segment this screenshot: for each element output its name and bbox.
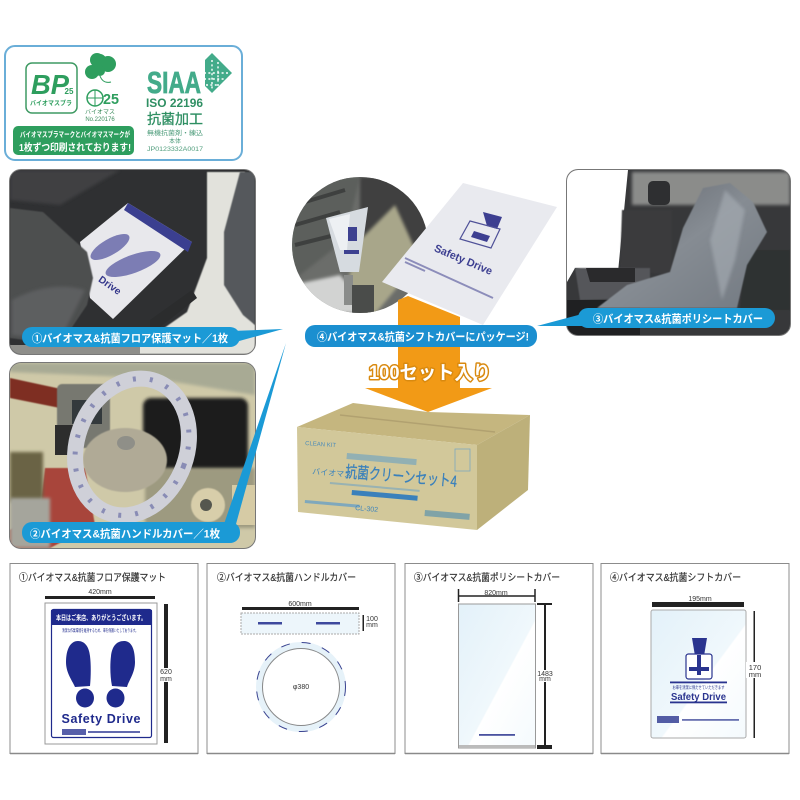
heading: ①バイオマス&抗菌フロア保護マット <box>19 571 166 584</box>
box print <box>305 441 470 520</box>
packaging print <box>405 212 502 298</box>
width dimension: 820mm <box>484 590 508 597</box>
text: antibacterial certification: 本体 <box>169 137 181 145</box>
height dimension: mm <box>749 670 761 679</box>
width dimension <box>242 601 359 610</box>
panel: shift cover photo <box>292 177 430 320</box>
width dimension: 420mm <box>88 589 112 596</box>
callout: printed on each sheet: バイオマスプラマークとバイオマスマークが <box>20 129 130 139</box>
label: floor mat: ①バイオマス&抗菌フロア保護マット／1枚 <box>32 331 228 345</box>
panel: shift cover packaging <box>382 183 557 325</box>
text: antibacterial certification <box>146 96 204 153</box>
callout: printed on each sheet <box>13 126 134 155</box>
text: antibacterial certification: 抗菌加工 <box>147 111 203 127</box>
label: seat cover: ③バイオマス&抗菌ポリシートカバー <box>593 312 763 326</box>
panel: floor mat photo <box>9 169 283 355</box>
shift cover bag diagram: お車を清潔に保たせていただきます <box>672 684 725 691</box>
flat wheel cover: mm <box>366 622 378 629</box>
width dimension: 195mm <box>688 596 712 603</box>
icon: biomass plastic mark: 25 <box>65 87 74 96</box>
panel: certification badge <box>5 46 242 160</box>
width dimension: 600mm <box>288 601 312 608</box>
callout: printed on each sheet: 1枚ずつ印刷されております! <box>19 141 131 154</box>
panel: seat cover spec <box>405 564 593 754</box>
floor mat diagram: 清潔な作業環境を維持するため、車を保護いたしております。 <box>62 627 138 634</box>
width dimension <box>458 589 535 602</box>
floor mat diagram: Safety Drive <box>62 712 141 726</box>
height dimension: mm <box>539 676 551 683</box>
flat wheel cover: 100 <box>366 616 378 623</box>
box print: CL-302 <box>355 505 378 514</box>
photo: car floor with mat <box>10 170 255 354</box>
height dimension: 620 <box>160 669 172 676</box>
shift cover bag <box>326 207 368 272</box>
arrow: orange down <box>365 296 492 412</box>
height dimension: 1483 <box>537 671 553 678</box>
heading: ③バイオマス&抗菌ポリシートカバー <box>414 571 560 584</box>
photo: seat with poly cover <box>567 170 790 335</box>
icon: biomass plastic mark: バイオマスプラ <box>30 99 72 107</box>
label: wheel cover: ②バイオマス&抗菌ハンドルカバー／1枚 <box>30 526 220 540</box>
ring wheel cover: φ380 <box>293 684 309 691</box>
heading: ④バイオマス&抗菌シフトカバー <box>610 571 741 584</box>
label: shift cover <box>305 325 537 347</box>
heading: ②バイオマス&抗菌ハンドルカバー <box>217 571 356 584</box>
height dimension <box>537 603 554 749</box>
icon: biomass clover mark: 25 <box>103 91 119 108</box>
label: wheel cover <box>22 343 286 543</box>
icon: SIAA mark: SIAA <box>147 65 201 100</box>
seat cover sheet <box>458 604 536 748</box>
panel: wheel cover spec <box>207 564 395 754</box>
height dimension: 170 <box>749 663 761 672</box>
height dimension: mm <box>160 676 172 683</box>
label: seat cover <box>537 308 775 328</box>
panel: seat cover photo <box>537 169 791 336</box>
width dimension <box>652 596 744 607</box>
icon: biomass plastic mark <box>26 63 77 113</box>
icon: biomass plastic mark: BP <box>31 69 69 100</box>
flat wheel cover <box>241 613 378 634</box>
icon: SIAA mark <box>147 53 232 100</box>
width dimension <box>45 589 155 599</box>
packaging print: Safety Drive <box>432 243 494 278</box>
text: antibacterial certification: JP0123332A0017 <box>147 147 204 153</box>
floor mat diagram: 本日はご来店、ありがとうございます。 <box>56 613 146 622</box>
box print: CLEAN KIT <box>305 441 337 449</box>
text: antibacterial certification: 無機抗菌剤・練込 <box>147 128 204 137</box>
panel: steering wheel cover photo <box>9 343 286 549</box>
icon: biomass clover mark: No.220176 <box>85 117 115 123</box>
height dimension <box>746 611 764 738</box>
poly cover <box>597 183 767 308</box>
footprints <box>66 641 135 708</box>
box print: バイオマス <box>312 467 352 479</box>
floor mat diagram <box>45 603 157 744</box>
wheel cover <box>67 370 197 522</box>
floor mat <box>80 203 192 319</box>
text: 100 sets: 100セット入り <box>369 362 491 384</box>
floor mat: Drive <box>96 274 123 298</box>
cardboard box <box>297 403 530 530</box>
label: floor mat <box>22 327 283 347</box>
shift cover bag diagram <box>651 610 746 738</box>
label: shift cover: ④バイオマス&抗菌シフトカバーにパッケージ! <box>317 330 529 344</box>
icon: biomass clover mark <box>85 53 119 123</box>
box print: 抗菌クリーンセット4 <box>345 463 458 491</box>
text: antibacterial certification: ISO 22196 <box>146 96 203 110</box>
panel: floor mat spec <box>10 564 198 754</box>
icon: biomass clover mark: バイオマス <box>85 109 115 116</box>
photo: steering wheel with cover <box>10 362 255 548</box>
height dimension <box>158 604 174 743</box>
icon: shift knob <box>686 638 712 679</box>
ring wheel cover <box>256 642 346 732</box>
panel: shift cover spec <box>601 564 789 754</box>
shift cover bag diagram: Safety Drive <box>671 692 726 703</box>
